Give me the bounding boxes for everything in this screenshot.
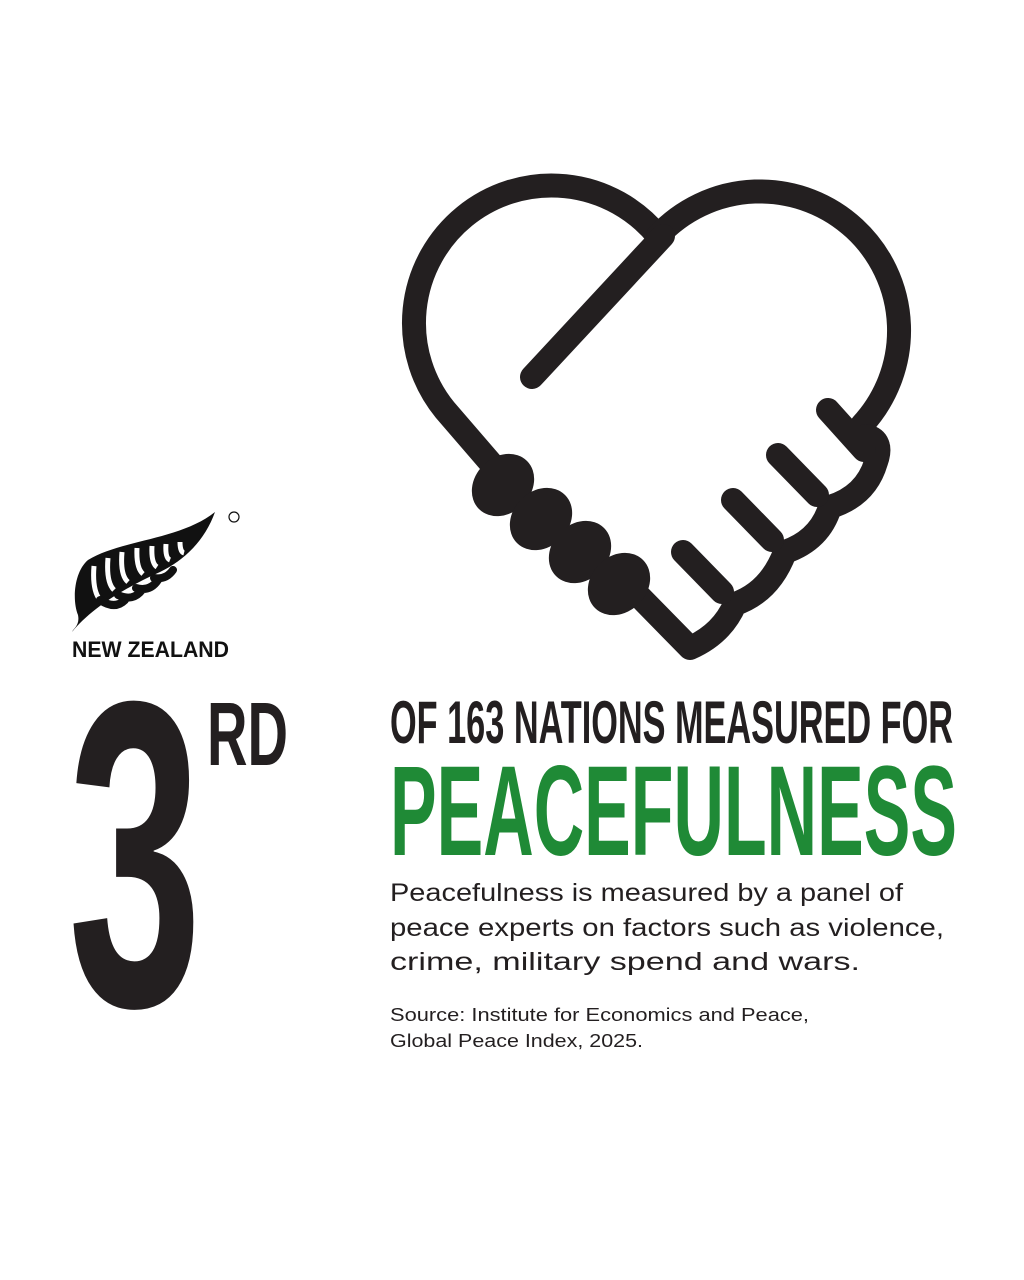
heading [390,689,957,883]
source [390,1005,809,1051]
source: Source: Institute for Economics and Peace, [390,1005,809,1025]
big number: 3rd: RD [207,685,288,785]
logo: silver fern New Zealand: NEW ZEALAND [72,637,229,662]
big number: 3rd: 3 [68,611,202,1098]
body text [390,879,944,976]
body text: peace experts on factors such as violence, [390,914,944,942]
logo: silver fern New Zealand [72,512,239,662]
body text: Peacefulness is measured by a panel of [390,879,903,907]
source: Global Peace Index, 2025. [390,1031,643,1051]
body text: crime, military spend and wars. [390,948,860,976]
icon: heart handshake [414,185,899,648]
